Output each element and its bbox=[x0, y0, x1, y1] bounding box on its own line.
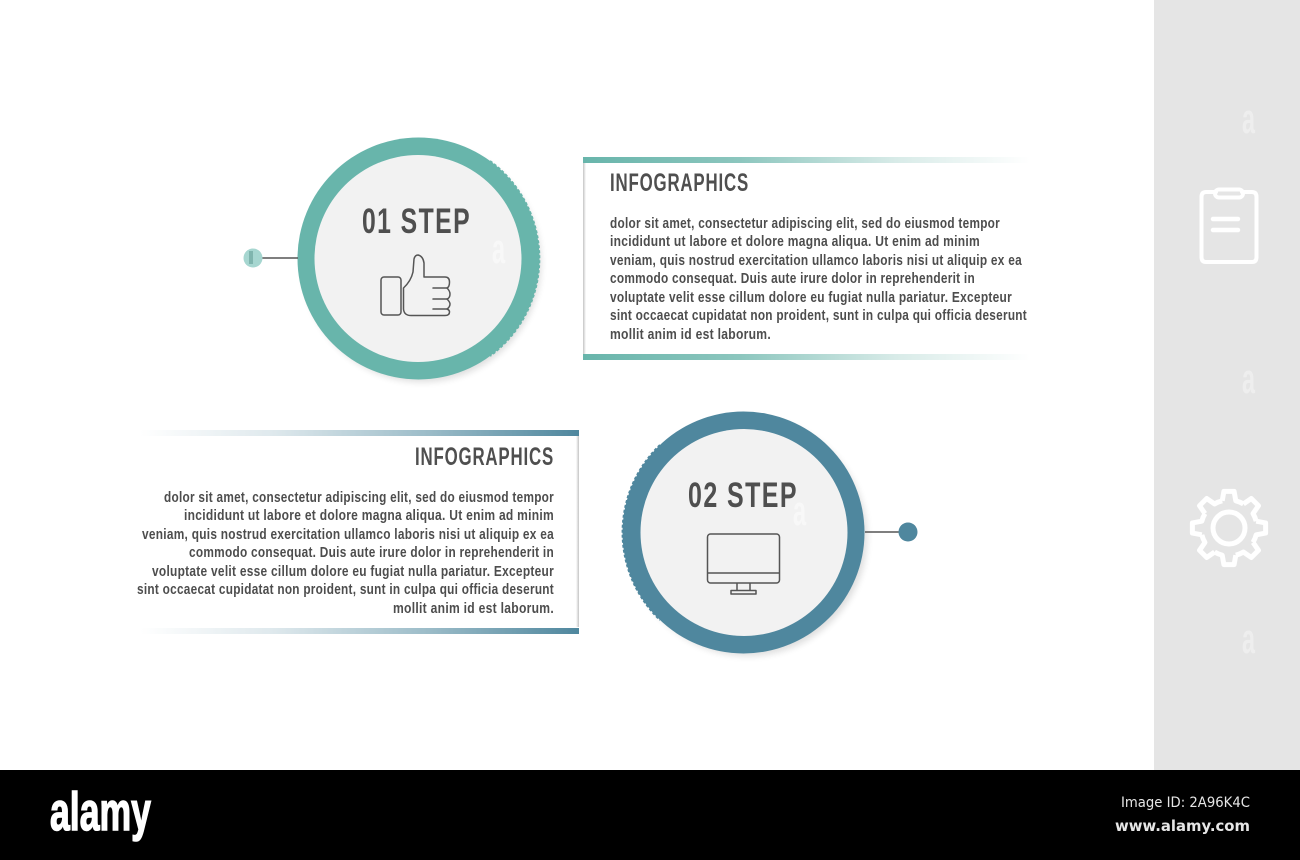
step 1 circle bbox=[298, 138, 541, 382]
watermark in circle 1: a bbox=[492, 225, 505, 272]
body text: step 2: veniam, quis nostrud exercitation ullamco laboris nisi ut aliquip ex ea bbox=[142, 526, 554, 543]
watermark letters: a bbox=[1242, 615, 1255, 662]
image id: Image ID: 2A96K4C bbox=[1121, 795, 1250, 811]
step 2 circle bbox=[622, 412, 867, 656]
panel: step 2 text bbox=[137, 430, 579, 634]
heading: step 1: INFOGRAPHICS bbox=[610, 169, 749, 197]
body text: step 1: commodo consequat. Duis aute irure dolor in reprehenderit in bbox=[610, 270, 975, 287]
logo: alamy bbox=[50, 782, 151, 842]
body text: step 1: mollit anim id est laborum. bbox=[610, 326, 771, 343]
right sidebar panel bbox=[1154, 0, 1300, 770]
icon: clipboard bbox=[1202, 190, 1256, 262]
body text: step 1: incididunt ut labore et dolore magna aliqua. Ut enim ad minim bbox=[610, 233, 980, 250]
body text: step 2: commodo consequat. Duis aute irure dolor in reprehenderit in bbox=[189, 544, 554, 561]
step 1 label: 01 STEP bbox=[362, 202, 471, 241]
watermark letters: a bbox=[1242, 355, 1255, 402]
body text: step 1: veniam, quis nostrud exercitation ullamco laboris nisi ut aliquip ex ea bbox=[610, 252, 1022, 269]
body text: step 2: incididunt ut labore et dolore magna aliqua. Ut enim ad minim bbox=[184, 507, 554, 524]
panel: step 1 text bbox=[583, 157, 1030, 360]
website: www.alamy.com bbox=[1115, 817, 1250, 835]
watermark letters bbox=[1242, 95, 1255, 662]
connector: step 1 bbox=[244, 248, 298, 268]
body text: step 1: sint occaecat cupidatat non proident, sunt in culpa qui officia deserunt bbox=[610, 307, 1027, 324]
body text: step 2: mollit anim id est laborum. bbox=[393, 600, 554, 617]
body text: step 2 bbox=[137, 489, 554, 617]
step 2 label: 02 STEP bbox=[688, 476, 798, 515]
body text: step 2: sint occaecat cupidatat non proident, sunt in culpa qui officia deserunt bbox=[137, 581, 554, 598]
connector: step 2 bbox=[865, 522, 918, 542]
icon: thumbs up bbox=[381, 255, 450, 316]
body text: step 1 bbox=[610, 215, 1027, 343]
icon: gear bbox=[1192, 491, 1266, 565]
body text: step 2: dolor sit amet, consectetur adipiscing elit, sed do eiusmod tempor bbox=[164, 489, 554, 506]
body text: step 2: voluptate velit esse cillum dolore eu fugiat nulla pariatur. Excepteur bbox=[152, 563, 554, 580]
footer bar bbox=[0, 770, 1300, 860]
body text: step 1: voluptate velit esse cillum dolore eu fugiat nulla pariatur. Excepteur bbox=[610, 289, 1012, 306]
body text: step 1: dolor sit amet, consectetur adipiscing elit, sed do eiusmod tempor bbox=[610, 215, 1000, 232]
watermark in circle 2: a bbox=[793, 487, 806, 534]
icon: monitor bbox=[708, 534, 780, 594]
heading: step 2: INFOGRAPHICS bbox=[415, 443, 554, 471]
watermark letters: a bbox=[1242, 95, 1255, 142]
